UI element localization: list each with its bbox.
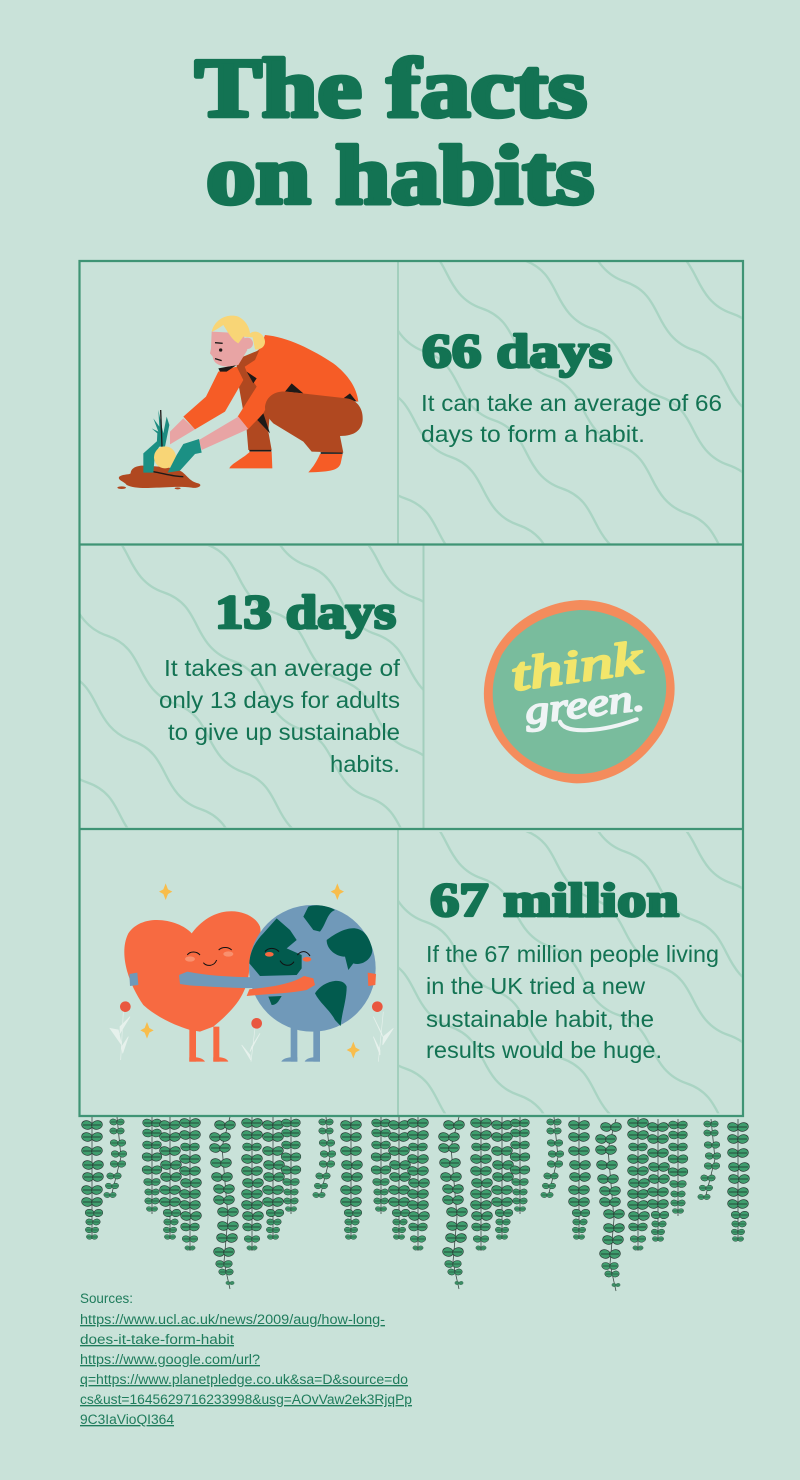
text: 13 days description: habits. — [330, 751, 400, 777]
icon: think green badge — [484, 600, 675, 783]
text: sources: cs&ust=1645629716233998&usg=AOvVaw2ek3RjqPp — [80, 1392, 412, 1407]
text: 66 days description — [421, 390, 722, 447]
text: 13 days description — [159, 655, 400, 777]
title: The facts — [195, 42, 587, 135]
heading: 67 million: 67 million — [430, 874, 679, 927]
text: green: green. — [523, 677, 647, 733]
text: sources: q=https://www.planetpledge.co.uk&sa=D&source=do — [80, 1372, 408, 1387]
text: 13 days description: It takes an average of — [164, 655, 400, 681]
title: on habits — [206, 129, 594, 222]
vines hanging from the frame — [81, 1117, 750, 1291]
icon: hugging arms — [179, 972, 300, 988]
text: think: think — [508, 631, 647, 702]
text: 67 million description — [426, 941, 719, 1063]
icon: flowers — [110, 1001, 393, 1062]
text: 67 million description: in the UK tried a new — [426, 973, 646, 999]
icon: faces — [187, 947, 310, 965]
text: 66 days description: It can take an average of 66 — [421, 390, 722, 416]
text: 13 days description: only 13 days for adults — [159, 687, 400, 713]
text: 13 days description: to give up sustainable — [168, 719, 400, 745]
icon: gardener planting — [117, 316, 363, 489]
text: sources — [80, 1291, 412, 1427]
grid frame — [80, 261, 743, 1116]
text: sources: https://www.google.com/url? — [80, 1352, 260, 1367]
text: sources: 9C3IaVioQI364 — [80, 1412, 174, 1427]
icon: heart hugging earth — [110, 883, 393, 1062]
panel: 67 million stat — [268, 693, 800, 1410]
text: 66 days description: days to form a habit. — [421, 421, 645, 447]
heading: 66 days: 66 days — [422, 325, 612, 378]
panel: 13 days stat — [0, 407, 755, 1124]
icon: sparkles — [140, 883, 360, 1058]
text: 67 million description: results would be huge. — [426, 1037, 662, 1063]
text: sources: does-it-take-form-habit — [80, 1332, 234, 1347]
text: 67 million description: If the 67 million people living — [426, 941, 719, 967]
title — [195, 42, 594, 222]
text: sources: Sources: — [80, 1291, 133, 1306]
text: 67 million description: sustainable habit, the — [426, 1006, 654, 1032]
text: sources: https://www.ucl.ac.uk/news/2009/aug/how-long- — [80, 1312, 385, 1327]
panel: 66 days stat — [268, 123, 800, 840]
heading: 13 days: 13 days — [215, 586, 396, 639]
icon: continents — [249, 905, 372, 1026]
